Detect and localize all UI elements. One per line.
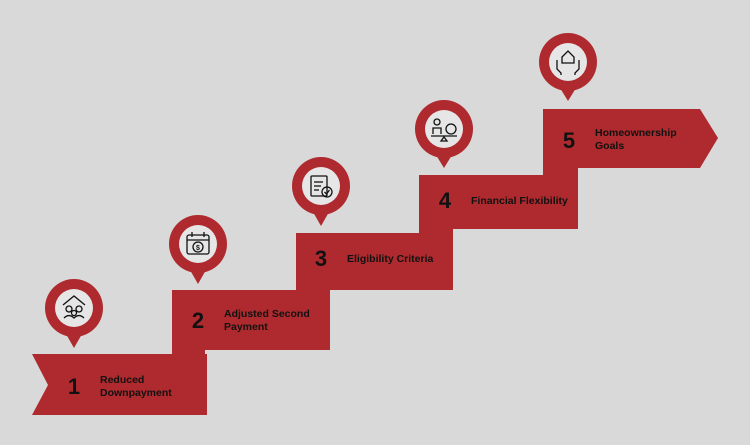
step 1 label: Reduced <box>100 374 144 386</box>
step 4 ribbon <box>419 175 578 236</box>
step 5 label: Goals <box>595 140 624 152</box>
step 5 ribbon <box>543 109 718 176</box>
pin 4: person and coin balance icon <box>415 100 473 168</box>
pin 5: hands holding house icon <box>539 33 597 101</box>
step 5 label: Homeownership <box>595 127 677 139</box>
step 1 ribbon <box>32 354 207 415</box>
step 1 label: Downpayment <box>100 387 172 399</box>
pin 1: family icon <box>45 279 103 348</box>
pin 2: calendar dollar icon <box>169 215 227 284</box>
step 5 number: 5 <box>563 128 575 153</box>
pin 2: calendar dollar icon: $ <box>196 245 200 252</box>
step 4 label: Financial Flexibility <box>471 195 568 207</box>
step 2 ribbon <box>172 290 330 356</box>
step 2 number: 2 <box>192 308 204 333</box>
step 1 number: 1 <box>68 374 80 399</box>
step 2 label: Payment <box>224 321 268 333</box>
step 3 label: Eligibility Criteria <box>347 253 434 265</box>
step 3 ribbon <box>296 233 453 292</box>
step 2 label: Adjusted Second <box>224 308 310 320</box>
step 4 number: 4 <box>439 188 452 213</box>
pin 3: clipboard check icon <box>292 157 350 226</box>
step 3 number: 3 <box>315 246 327 271</box>
